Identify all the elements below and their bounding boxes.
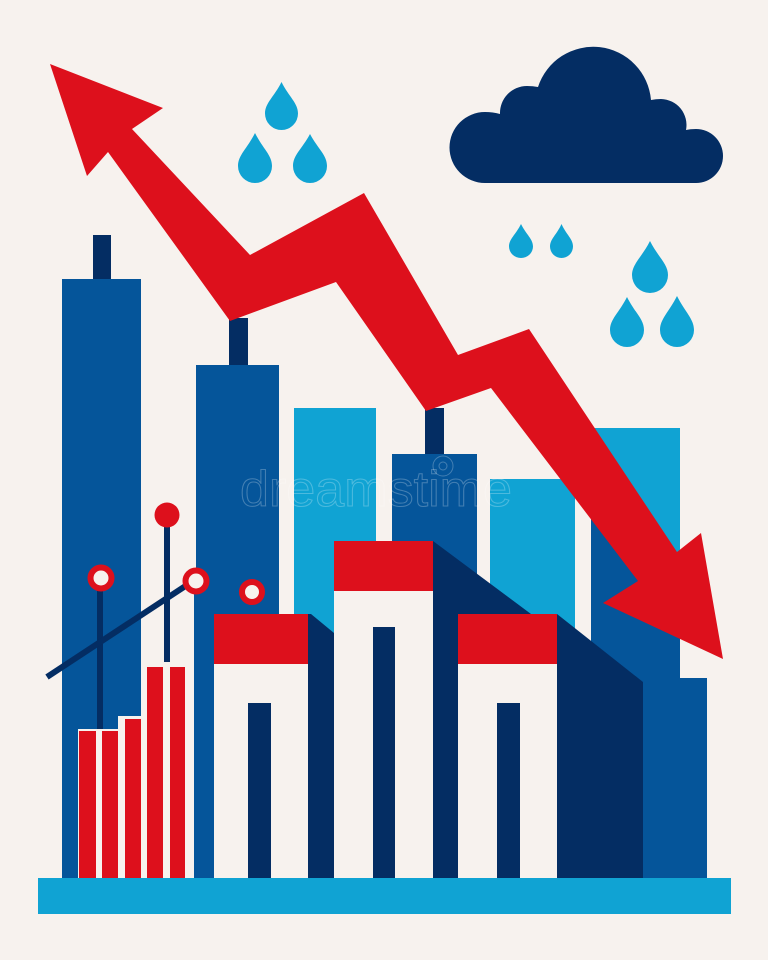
house 2 [334,541,433,878]
raindrops upper left [238,82,327,183]
house 1 [214,614,308,878]
cloud [450,47,723,183]
ground bar [38,878,731,914]
house 3 and back wall shadow [433,541,643,878]
house 1 side wall [308,614,334,878]
big red zigzag arrow [50,64,723,659]
house 3 [458,614,557,878]
cyan buildings [294,408,680,649]
right blue building [591,510,707,878]
chart pins and trend line [47,502,262,729]
tall blue towers [62,279,477,878]
watermark: dreamstime [240,461,512,517]
tower chimneys [93,235,444,454]
small red bar chart [78,667,185,878]
raindrops under cloud [509,224,694,347]
